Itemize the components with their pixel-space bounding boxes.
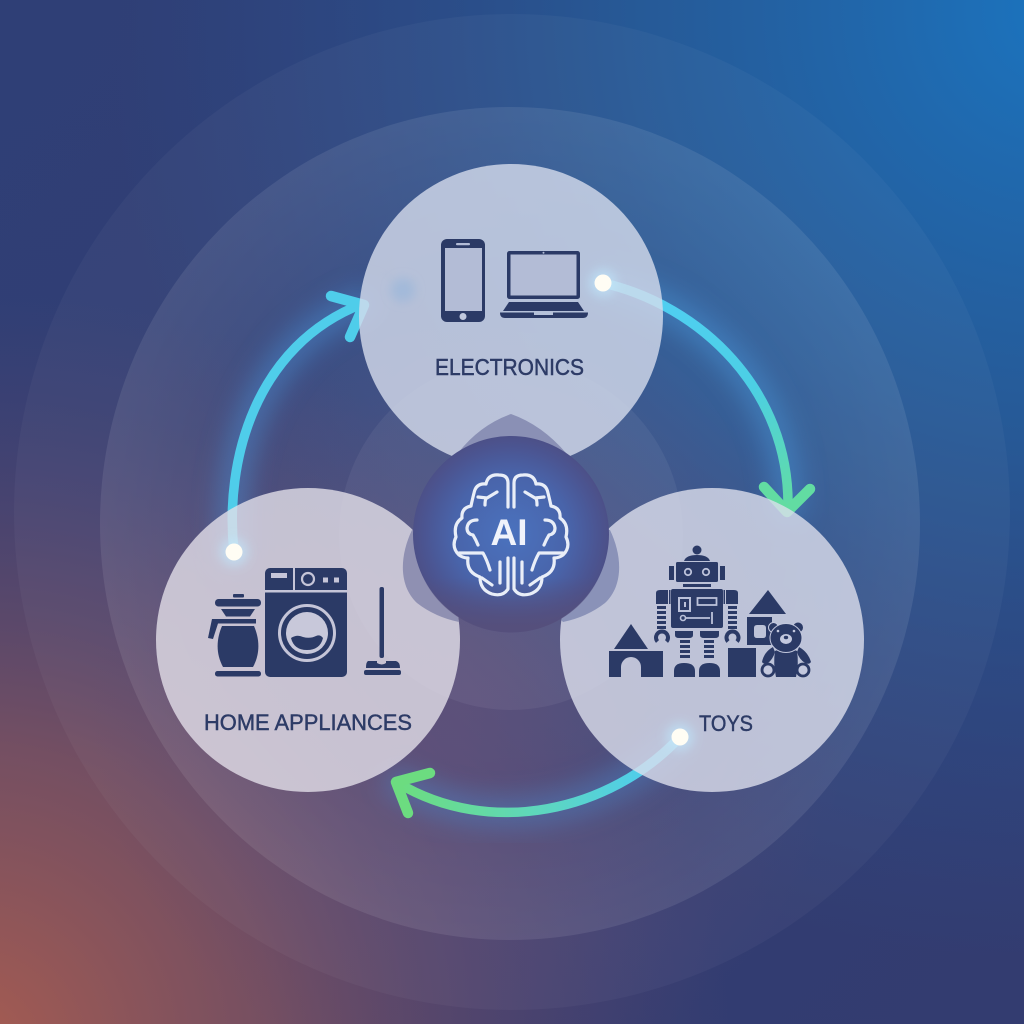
- icon: robot: [656, 546, 739, 677]
- icon: toy blocks: [609, 590, 786, 677]
- panel: toys: [542, 488, 864, 792]
- icon: coffee maker: [208, 594, 261, 676]
- icon: teddy bear: [762, 622, 811, 677]
- icon: mop: [364, 587, 401, 675]
- central AI hub: [412, 436, 610, 632]
- icon: brain: [454, 475, 568, 595]
- icon: smartphone: [441, 239, 485, 322]
- glowing node dots: [220, 269, 694, 751]
- icon: laptop: [500, 251, 588, 318]
- panel: electronics: [359, 164, 663, 480]
- label: AI: AI: [490, 512, 528, 553]
- icon: washing machine: [265, 568, 347, 677]
- panel: home appliances: [156, 488, 480, 792]
- label: toys: TOYS: [699, 711, 753, 736]
- label: home appliances: HOME APPLIANCES: [204, 710, 412, 735]
- arrow: electronics to toys: [603, 283, 810, 512]
- arrow: toys to home appliances: [396, 737, 680, 813]
- arrow: home appliances to electronics: [232, 296, 364, 552]
- label: electronics: ELECTRONICS: [435, 354, 584, 380]
